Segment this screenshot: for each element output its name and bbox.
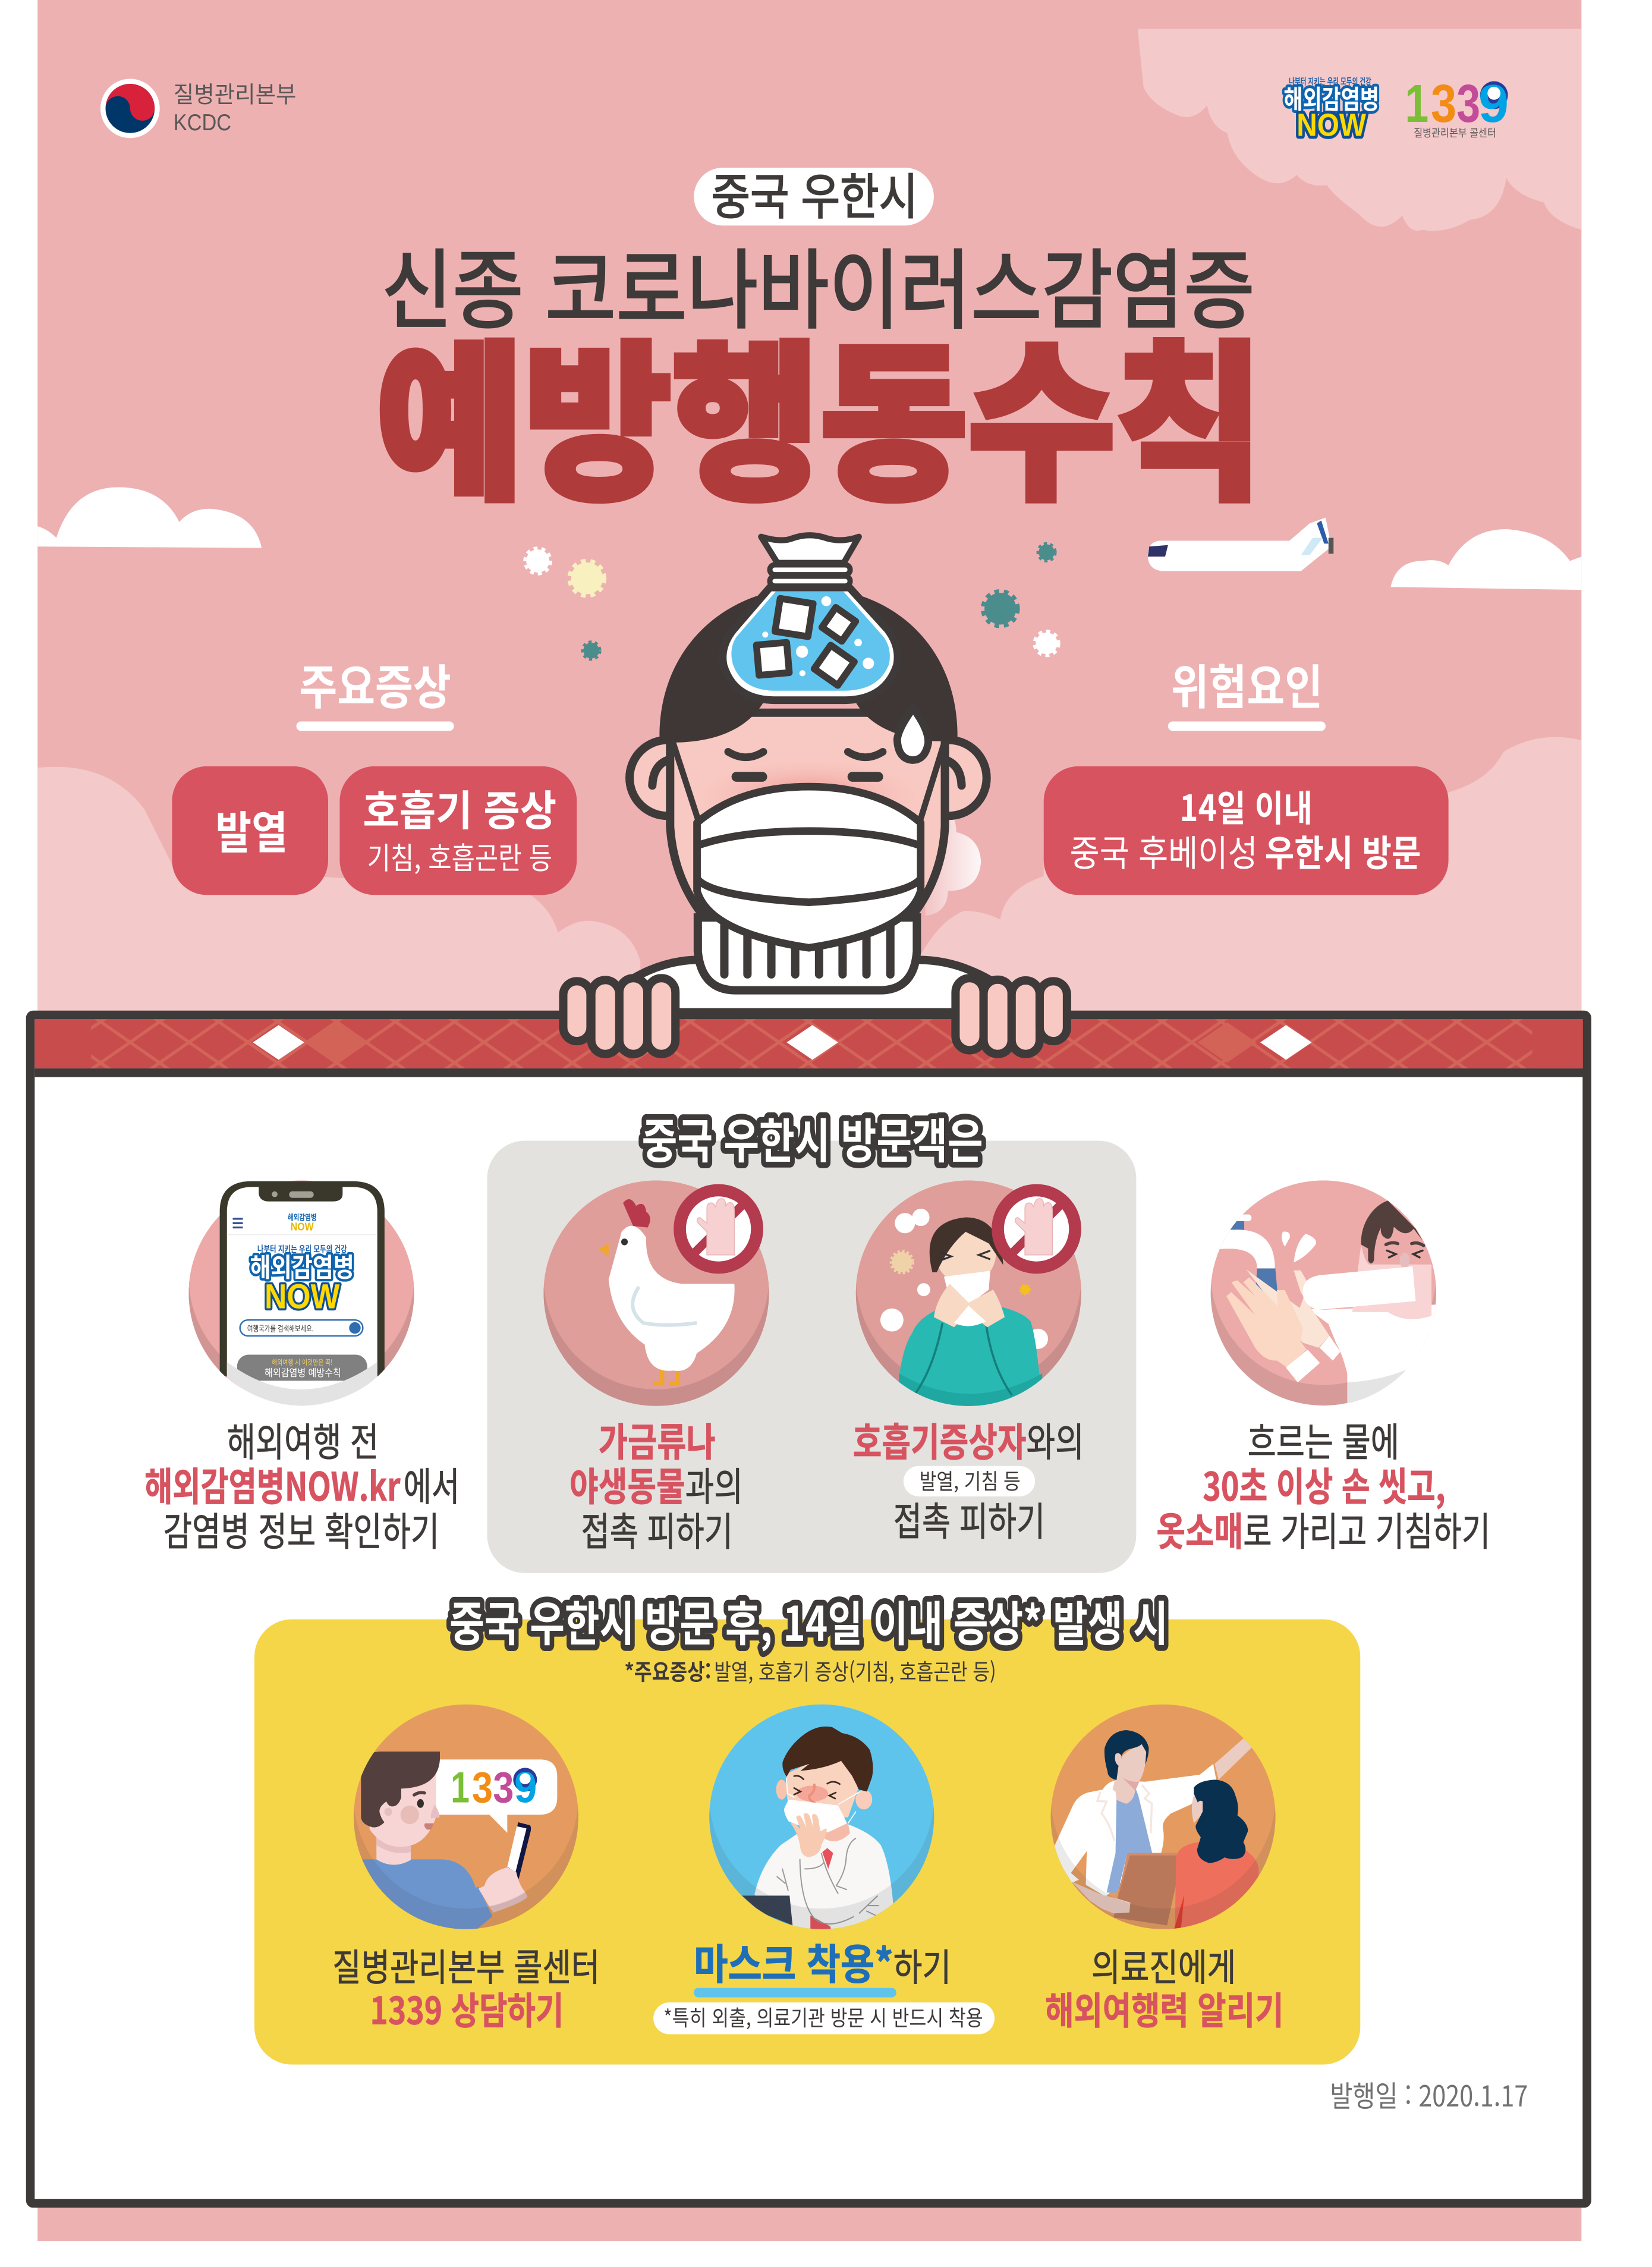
text: avoid poultry: 야생동물 (569, 1455, 685, 1512)
logo: 1339 call center: 1 (1405, 74, 1428, 134)
heading: within 14 days after visit: 중국 우한시 방문 후, 14일 이내 증상* 발생 시 (449, 1586, 1168, 1655)
icon: phone with website: 해외감염병 예방수칙 (265, 1364, 341, 1379)
publication date: 발행일 : 2020.1.17 (1330, 2074, 1528, 2115)
logo: overseas infection NOW (1283, 75, 1379, 143)
text: tell medical staff (1045, 1938, 1283, 2035)
text: wear mask: 하기 (893, 1938, 951, 1992)
text: wear mask (653, 1931, 995, 2034)
heading: main symptoms: 주요증상 (299, 649, 451, 718)
text: wash hands (1156, 1411, 1490, 1557)
frame and white content panel (30, 1015, 1587, 2203)
puff of breath (925, 804, 981, 916)
box: visit within 14 days: 중국 후베이성 (1069, 824, 1258, 877)
text: call 1339 (332, 1938, 600, 2035)
text: avoid poultry: 과의 (685, 1455, 743, 1512)
text: avoid poultry: 가금류나 (599, 1411, 716, 1467)
face (670, 713, 945, 914)
icon: airplane (1148, 518, 1333, 571)
note: main symptoms (625, 1654, 996, 1687)
box: respiratory symptoms: 호흡기 증상 (363, 778, 556, 838)
ears (630, 740, 987, 816)
panel: gray avoid contact (487, 1141, 1136, 1573)
patterned band (34, 1019, 1583, 1077)
icon: person calling 1339: 9 (514, 1763, 537, 1812)
text: avoid respiratory patients (853, 1411, 1084, 1547)
text: wash hands: 로 가리고 기침하기 (1243, 1501, 1490, 1557)
icon: gripping hands (563, 978, 1067, 1054)
eyes (728, 752, 883, 777)
sweat drop (897, 708, 929, 760)
underline (694, 1988, 896, 1997)
icon: no-contact sign (992, 1184, 1081, 1274)
icon: phone with website: 해외여행 시 이것만은 꼭! (272, 1357, 332, 1367)
icon: viruses (526, 545, 1058, 659)
right hand (955, 978, 1067, 1054)
icon: phone with website: 나부터 지키는 우리 모두의 건강 (257, 1243, 347, 1255)
text: check NOW site: 에서 (403, 1455, 460, 1512)
text: wash hands: 흐르는 물에 (1248, 1411, 1399, 1467)
text: wear mask: *특히 외출, 의료기관 방문 시 반드시 착용 (663, 2001, 983, 2032)
icon: phone with website: 여행국가를 검색해보세요. (247, 1322, 314, 1334)
note: main symptoms: 발열, 호흡기 증상(기침, 호흡곤란 등) (714, 1654, 996, 1687)
hair (659, 587, 958, 743)
text: check NOW site: 해외감염병NOW.kr (144, 1455, 401, 1512)
text: call 1339: 1339 상담하기 (370, 1981, 564, 2035)
text: check NOW site: 해외여행 전 (227, 1411, 379, 1467)
text: wear mask: 마스크 착용* (694, 1931, 893, 1992)
icon: person wearing mask (709, 1704, 934, 1929)
text: avoid respiratory patients: 발열, 기침 등 (920, 1464, 1021, 1496)
icon: phone with website: 해외감염병 (288, 1210, 317, 1222)
icon: person calling 1339: 3 (472, 1763, 493, 1812)
text: tell medical staff: 의료진에게 (1091, 1938, 1236, 1992)
cloud: top right (1138, 29, 1581, 231)
box: visit within 14 days: 우한시 방문 (1265, 824, 1421, 877)
icon: person calling 1339: 3 (493, 1763, 514, 1812)
text: call 1339: 질병관리본부 콜센터 (332, 1938, 600, 1992)
logo: 1339 call center: 3 (1456, 74, 1480, 134)
heading: Wuhan visitors: 중국 우한시 방문객은 (642, 1103, 983, 1172)
title line 2: 예방행동수칙 (376, 287, 1263, 534)
note: main symptoms: *주요증상: (625, 1654, 711, 1687)
icon: phone with website: NOW (265, 1278, 340, 1316)
icon: person calling 1339 (353, 1704, 578, 1929)
box: fever (172, 766, 328, 895)
heading: risk factor: 위험요인 (1171, 649, 1323, 718)
icon: chicken with prohibition (543, 1164, 769, 1406)
text: wash hands: 옷소매 (1156, 1501, 1243, 1557)
icon: phone with website (188, 1164, 414, 1410)
logo: 1339 call center (1405, 74, 1509, 140)
text: wash hands: 30초 이상 손 씻고, (1203, 1455, 1446, 1512)
box: respiratory symptoms: 기침, 호흡곤란 등 (367, 834, 552, 878)
icon: person calling 1339: 1 (451, 1763, 470, 1812)
text: avoid poultry: 접촉 피하기 (581, 1501, 733, 1557)
mask (673, 743, 944, 948)
title line 1: 신종 코로나바이러스감염증 (382, 221, 1255, 347)
box: respiratory symptoms (339, 766, 577, 895)
text: tell medical staff: 해외여행력 알리기 (1045, 1981, 1283, 2035)
text: check NOW site: 감염병 정보 확인하기 (163, 1501, 439, 1557)
icon: taegeuk (100, 79, 160, 138)
logo: 1339 call center: 질병관리본부 콜센터 (1414, 125, 1496, 140)
logo: 1339 call center: 9 (1478, 74, 1509, 134)
text: avoid respiratory patients: 접촉 피하기 (893, 1491, 1045, 1547)
logo: 1339 call center: 3 (1431, 74, 1456, 134)
text: avoid respiratory patients: 와의 (1027, 1411, 1084, 1467)
icon: phone with website: 해외감염병 (250, 1246, 354, 1284)
logo: overseas infection NOW: 해외감염병 (1283, 78, 1379, 116)
logo: overseas infection NOW: NOW (1297, 108, 1366, 143)
logo: overseas infection NOW: 나부터 지키는 우리 모두의 건강 (1289, 75, 1371, 87)
collar (698, 917, 917, 991)
blush (684, 754, 934, 838)
box: visit within 14 days: 14일 이내 (1179, 779, 1313, 832)
KCDC logo (100, 77, 297, 138)
icon: sneezing person with prohibition (856, 1181, 1081, 1406)
cloud: white right (1390, 529, 1581, 590)
icon: phone with website: NOW (291, 1220, 314, 1232)
shirt (603, 960, 1016, 1013)
text: avoid respiratory patients: 호흡기증상자 (853, 1411, 1027, 1467)
text: avoid poultry (569, 1411, 743, 1557)
ice bag (723, 535, 898, 700)
tag: Wuhan China: 중국 우한시 (711, 157, 918, 228)
cloud: lower right (896, 737, 1581, 1012)
cloud: white left (37, 488, 262, 548)
KCDC logo: KCDC (174, 110, 231, 136)
KCDC name: 질병관리본부 (174, 77, 297, 110)
cloud: lower left (37, 767, 640, 1012)
icon: no-touch sign (674, 1184, 763, 1274)
box: visit within 14 days (1044, 766, 1449, 895)
icon: doctor and patient (1051, 1704, 1276, 1929)
illustration: sick person with ice bag (603, 535, 1016, 1013)
icon: hand washing and coughing into sleeve (1210, 1181, 1436, 1406)
left hand (563, 978, 675, 1054)
box: fever: 발열 (215, 797, 288, 861)
panel: yellow after visit (254, 1620, 1360, 2065)
text: check NOW site (144, 1411, 460, 1557)
